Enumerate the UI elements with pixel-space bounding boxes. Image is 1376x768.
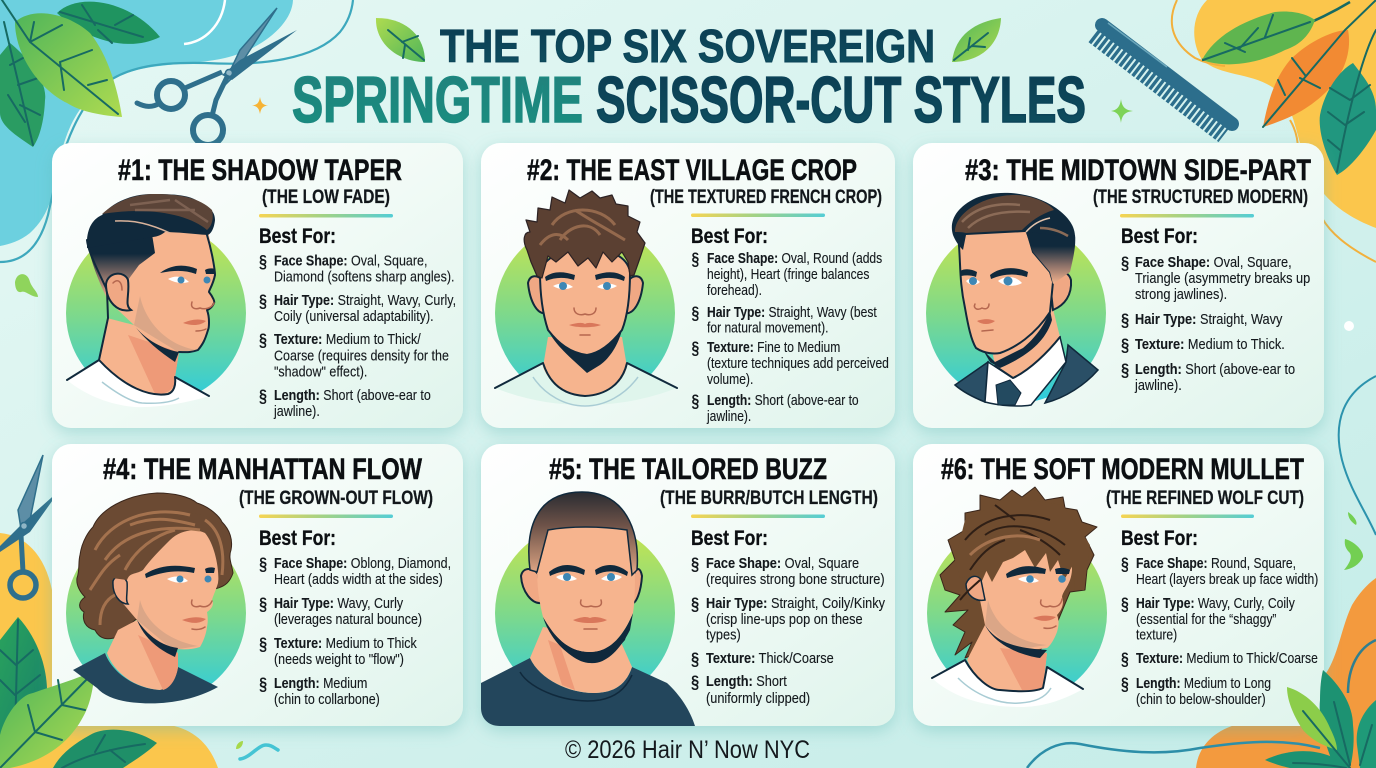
criteria list: (texture techniques add perceived xyxy=(707,355,889,371)
criteria list: (essential for the “shaggy” xyxy=(1136,611,1277,627)
criteria list: § xyxy=(691,339,699,358)
criteria list: Heart (adds width at the sides) xyxy=(274,570,443,587)
icon: comb xyxy=(1094,23,1232,135)
card 4 content xyxy=(66,453,451,707)
footer copyright: © 2026 Hair N’ Now NYC xyxy=(565,736,810,764)
criteria list: jawline). xyxy=(706,408,751,424)
portrait: buzz xyxy=(481,492,695,726)
card 2 content xyxy=(495,154,889,424)
divider bar xyxy=(1120,214,1254,218)
icon: top scissors xyxy=(137,8,297,145)
heading: #4: #4: THE MANHATTAN FLOW xyxy=(103,453,423,486)
panel: card 5 background xyxy=(481,444,895,726)
subheading: #2: (THE TEXTURED FRENCH CROP) xyxy=(650,186,882,208)
criteria list: Length: Short (above-ear to xyxy=(707,392,859,408)
criteria list: (requires strong bone structure) xyxy=(706,570,885,587)
criteria list: Diamond (softens sharp angles). xyxy=(274,267,454,285)
criteria list: Texture: Medium to Thick xyxy=(274,634,417,651)
criteria list: Heart (layers break up face width) xyxy=(1136,571,1318,587)
criteria list: Face Shape: Oval, Square, xyxy=(274,251,427,269)
criteria list: (leverages natural bounce) xyxy=(274,610,422,627)
subheading: #4: (THE GROWN-OUT FLOW) xyxy=(239,487,433,509)
title: SCISSOR-CUT STYLES xyxy=(596,63,1086,136)
sparkle: green xyxy=(1111,99,1133,123)
criteria list: § xyxy=(259,675,267,694)
criteria list: § xyxy=(259,331,267,350)
criteria list xyxy=(1121,253,1310,393)
splash: green drops right xyxy=(1344,512,1363,570)
criteria list: § xyxy=(691,649,699,669)
best for heading: Best For: xyxy=(259,527,336,550)
divider bar xyxy=(259,214,393,218)
title: THE TOP SIX SOVEREIGN xyxy=(440,20,935,72)
sparkle: orange xyxy=(252,97,268,114)
criteria list: § xyxy=(1121,650,1129,669)
panel: card 1 background xyxy=(52,143,463,428)
best for heading: Best For: xyxy=(691,225,768,248)
criteria list: § xyxy=(259,595,267,614)
criteria list: "shadow" effect). xyxy=(274,362,367,380)
criteria list: Hair Type: Straight, Wavy, Curly, xyxy=(274,291,456,308)
card 6 content xyxy=(927,453,1318,707)
leaves: top-right xyxy=(1202,0,1376,175)
dot: white xyxy=(1344,321,1354,331)
criteria list: Length: Short (above-ear to xyxy=(1135,360,1295,377)
criteria list: Triangle (asymmetry breaks up xyxy=(1135,269,1310,286)
criteria list: Length: Short xyxy=(706,672,787,689)
portrait: grown-out flow xyxy=(66,493,246,703)
heading: #5: #5: THE TAILORED BUZZ xyxy=(549,453,827,486)
criteria list: jawline). xyxy=(1134,376,1182,393)
portrait: textured crop xyxy=(495,190,677,406)
subheading: #3: (THE STRUCTURED MODERN) xyxy=(1093,186,1308,208)
panel: card 2 background xyxy=(481,143,895,428)
criteria list: for natural movement). xyxy=(707,319,828,336)
portrait: low fade xyxy=(66,194,246,407)
icon: left scissors xyxy=(0,455,60,598)
criteria list: § xyxy=(259,253,267,271)
portrait: wolf cut xyxy=(927,487,1107,707)
criteria list: forehead). xyxy=(707,282,762,298)
criteria list: § xyxy=(1121,595,1129,614)
portrait: side-part xyxy=(926,193,1106,406)
criteria list: strong jawlines). xyxy=(1135,285,1227,302)
criteria list: Texture: Medium to Thick. xyxy=(1135,335,1285,352)
criteria list xyxy=(259,251,456,419)
best for heading: Best For: xyxy=(1121,527,1198,550)
criteria list: (needs weight to "flow") xyxy=(274,650,404,667)
criteria list: texture) xyxy=(1136,626,1177,643)
criteria list xyxy=(691,250,889,424)
panel: card 4 background xyxy=(52,444,463,726)
leaf: bottom-left dark xyxy=(0,617,47,735)
criteria list: Hair Type: Straight, Coily/Kinky xyxy=(706,594,885,611)
divider bar xyxy=(1121,514,1254,518)
criteria list: § xyxy=(691,672,699,692)
divider bar xyxy=(691,514,825,518)
criteria list: Texture: Fine to Medium xyxy=(707,339,840,355)
criteria list: jawline). xyxy=(273,402,320,419)
heading: #2: #2: THE EAST VILLAGE CROP xyxy=(527,154,857,187)
criteria list: Coily (universal adaptability). xyxy=(274,307,434,324)
card 5 content xyxy=(481,453,885,726)
criteria list xyxy=(691,554,885,706)
leaf icon: title left xyxy=(376,18,425,62)
criteria list: Hair Type: Wavy, Curly xyxy=(274,594,403,611)
criteria list: § xyxy=(259,292,267,311)
leaves: bottom-left (over card corner) xyxy=(0,670,157,768)
criteria list: § xyxy=(259,555,267,574)
divider bar xyxy=(259,514,393,518)
criteria list: types) xyxy=(706,625,741,643)
criteria list: § xyxy=(691,304,699,323)
criteria list: § xyxy=(1121,675,1129,694)
leaf icon: title right xyxy=(952,18,1001,62)
criteria list: Face Shape: Oblong, Diamond, xyxy=(274,554,451,571)
background blob: bottom-right orange xyxy=(1027,578,1376,768)
criteria list: § xyxy=(1121,555,1129,574)
leaves: top-left xyxy=(0,0,160,147)
criteria list: Texture: Medium to Thick/Coarse xyxy=(1136,650,1318,666)
criteria list: § xyxy=(1121,310,1129,330)
criteria list: Length: Medium xyxy=(274,674,367,691)
card 3 content xyxy=(926,154,1311,406)
criteria list: Coarse (requires density for the xyxy=(274,346,449,364)
criteria list: § xyxy=(1121,360,1129,380)
criteria list: Hair Type: Straight, Wavy (best xyxy=(707,304,877,320)
criteria list: § xyxy=(1121,335,1129,355)
criteria list: (chin to collarbone) xyxy=(274,690,380,707)
divider bar xyxy=(691,214,825,217)
best for heading: Best For: xyxy=(691,527,768,550)
title xyxy=(292,20,1086,136)
criteria list: (uniformly clipped) xyxy=(706,689,810,706)
criteria list: Texture: Thick/Coarse xyxy=(706,649,834,666)
criteria list: Face Shape: Round, Square, xyxy=(1136,555,1296,571)
criteria list: height), Heart (fringe balances xyxy=(707,266,870,282)
best for heading: Best For: xyxy=(1121,225,1198,248)
criteria list: § xyxy=(691,594,699,614)
criteria list: Face Shape: Oval, Round (adds xyxy=(707,250,882,266)
criteria list xyxy=(259,554,451,707)
background blob: top-left blue xyxy=(0,0,353,262)
heading: #1: #1: THE SHADOW TAPER xyxy=(118,154,402,187)
criteria list: § xyxy=(259,635,267,654)
subheading: #5: (THE BURR/BUTCH LENGTH) xyxy=(660,487,878,509)
criteria list: Length: Medium to Long xyxy=(1136,675,1271,691)
criteria list: Length: Short (above-ear to xyxy=(274,386,431,403)
background blob: bottom-left yellow xyxy=(0,533,218,768)
criteria list: (crisp line-ups pop on these xyxy=(706,610,863,627)
card 1 content xyxy=(66,154,456,419)
background blob: top-right yellow xyxy=(1172,0,1376,262)
splash: teal squiggle xyxy=(236,741,278,759)
criteria list: § xyxy=(691,392,699,411)
panel: card 3 background xyxy=(913,143,1324,428)
criteria list: Hair Type: Wavy, Curly, Coily xyxy=(1136,595,1295,611)
criteria list: Face Shape: Oval, Square xyxy=(706,554,859,571)
criteria list: § xyxy=(259,387,267,406)
subheading: #1: (THE LOW FADE) xyxy=(262,186,390,208)
criteria list: Face Shape: Oval, Square, xyxy=(1135,253,1292,270)
panel: card 6 background xyxy=(913,444,1324,726)
criteria list xyxy=(1121,555,1318,707)
criteria list: § xyxy=(691,554,699,574)
criteria list: Texture: Medium to Thick/ xyxy=(274,330,421,347)
splash: green drop left xyxy=(15,274,38,297)
leaves: bottom-right (over card corner) xyxy=(1265,670,1376,768)
criteria list: (chin to below-shoulder) xyxy=(1136,691,1266,707)
criteria list: § xyxy=(691,250,699,269)
criteria list: Hair Type: Straight, Wavy xyxy=(1135,310,1282,327)
title: SPRINGTIME xyxy=(292,63,583,136)
criteria list: § xyxy=(1121,253,1129,273)
subheading: #6: (THE REFINED WOLF CUT) xyxy=(1106,487,1304,509)
best for heading: Best For: xyxy=(259,225,336,248)
criteria list: volume). xyxy=(707,371,753,387)
decorative curve: right side xyxy=(1339,376,1376,535)
